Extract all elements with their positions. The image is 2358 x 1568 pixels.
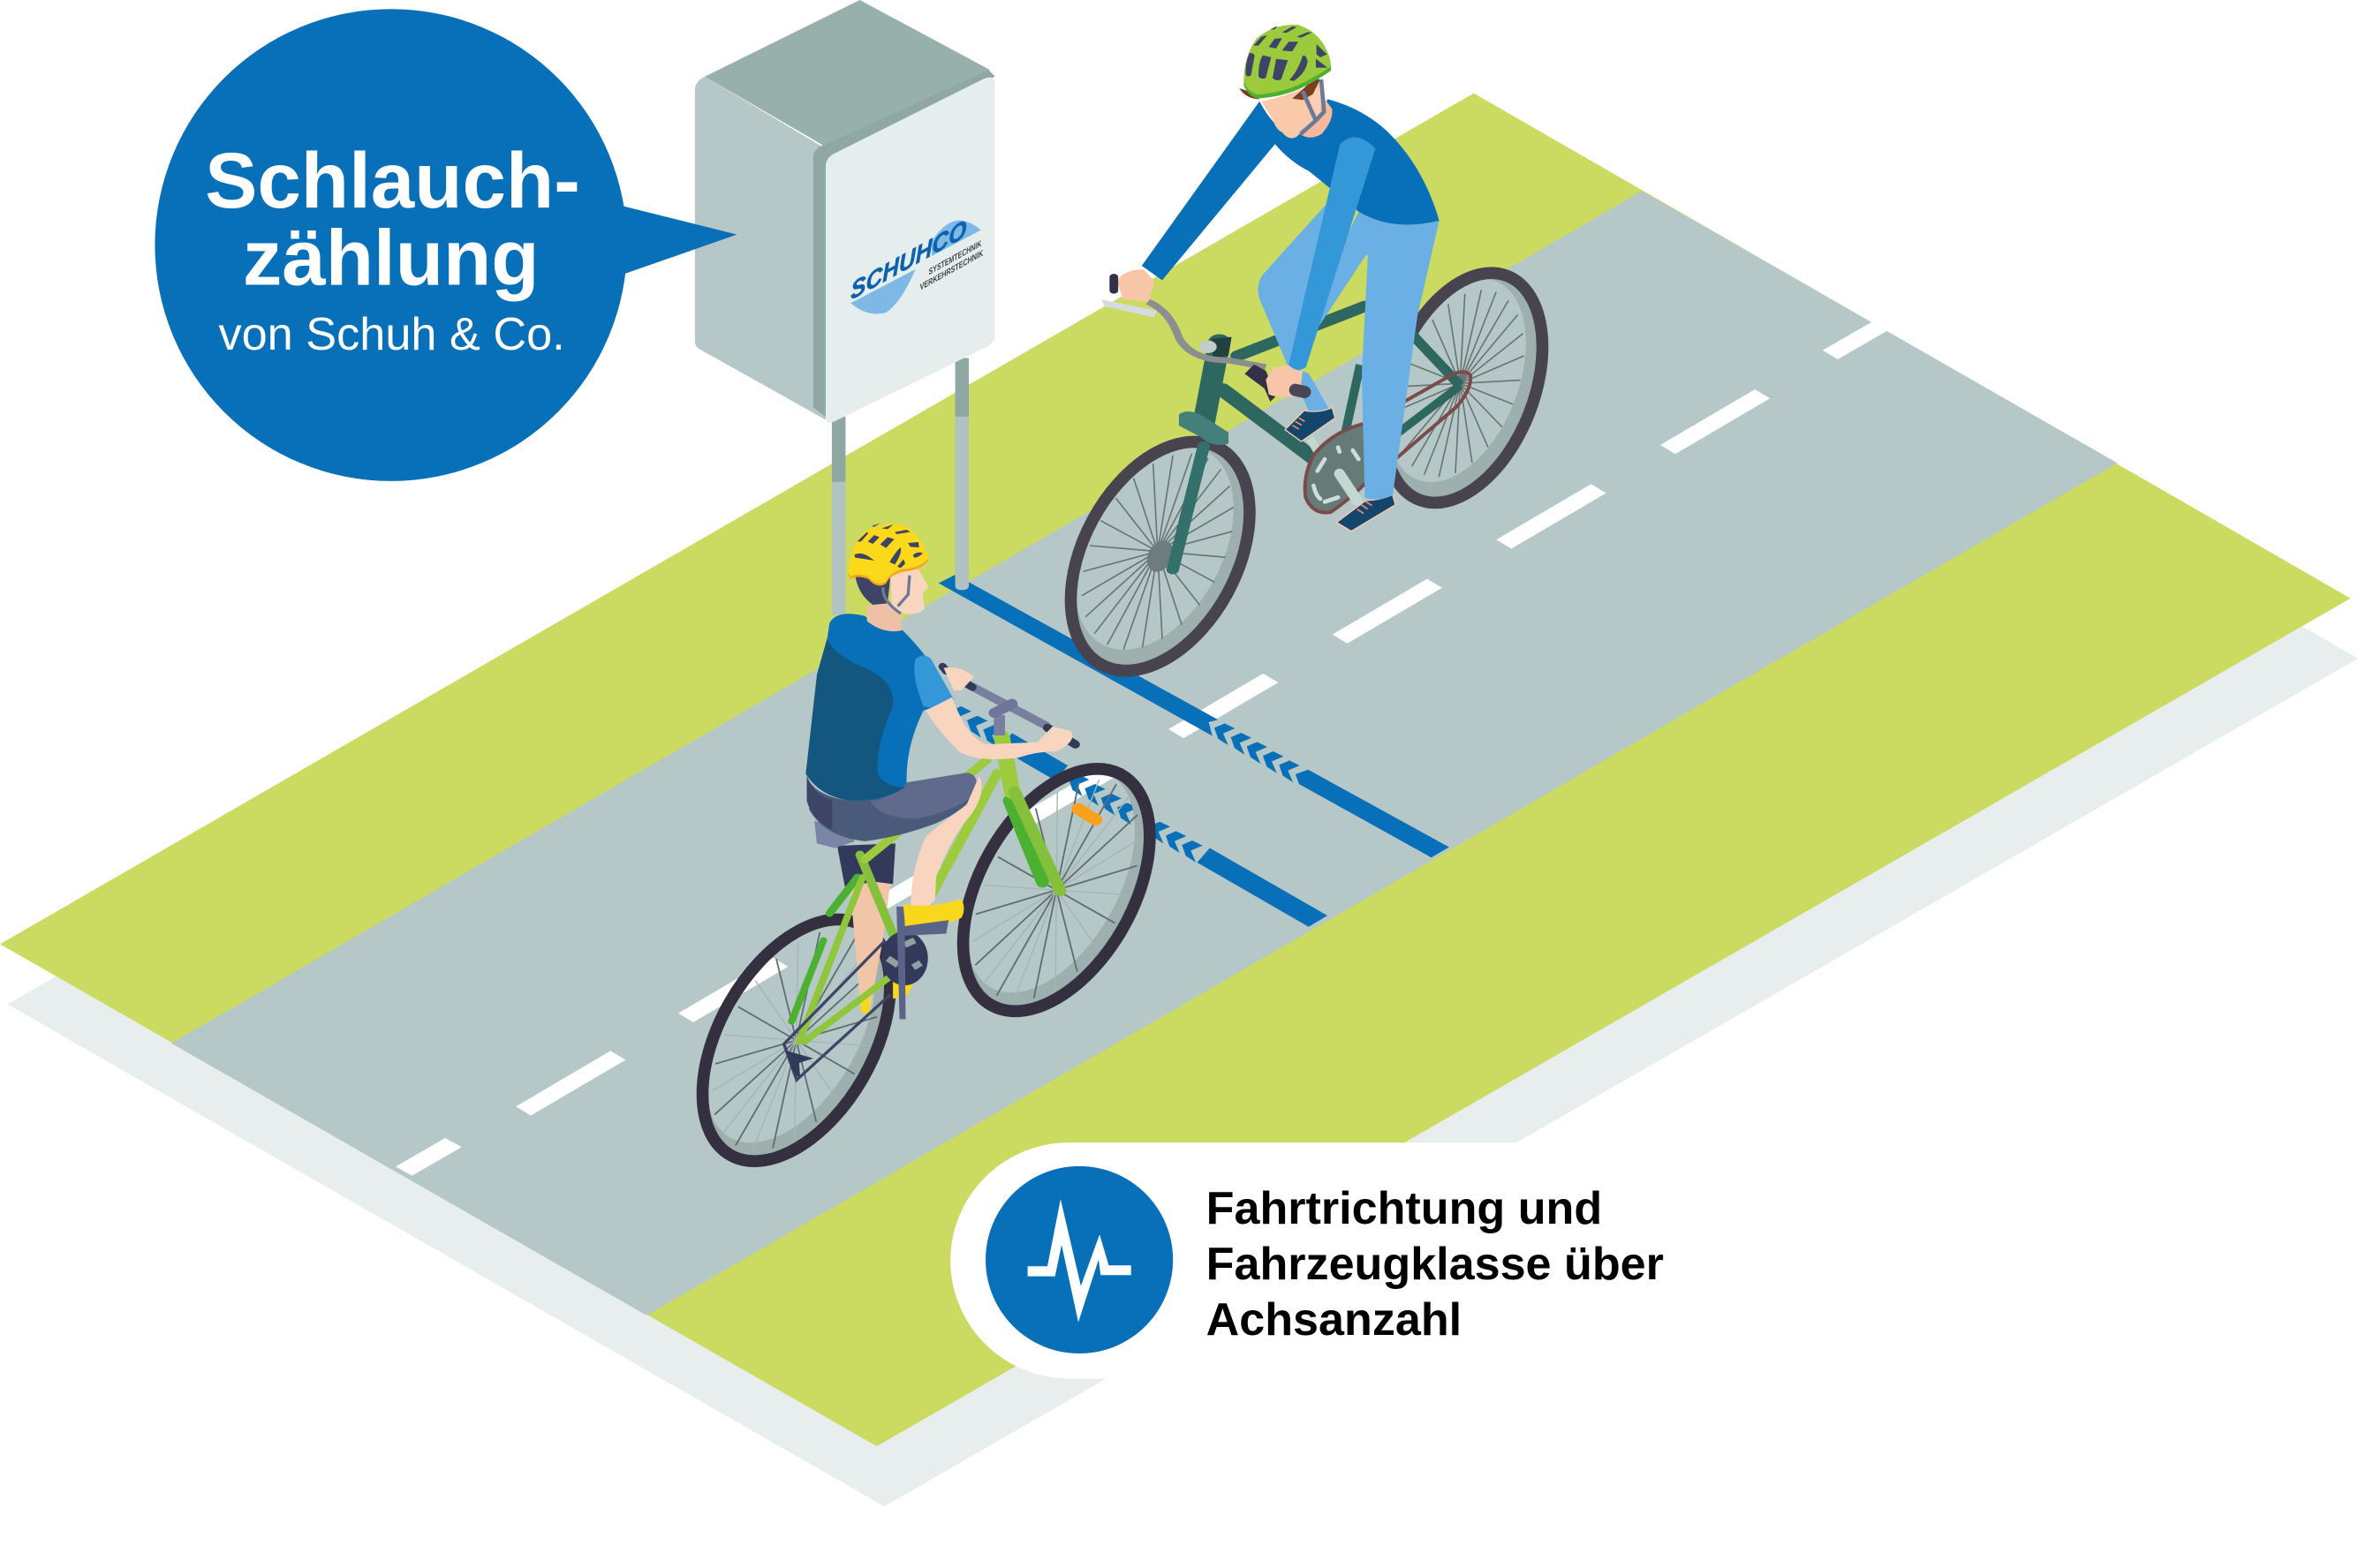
far shoe bbox=[1285, 408, 1335, 441]
callout: direction and vehicle class bbox=[950, 1142, 1804, 1378]
chain loop bbox=[1305, 372, 1470, 513]
box front bbox=[826, 78, 995, 423]
logo: VERKEHRSTECHNIK bbox=[920, 248, 983, 293]
logo: SYSTEMTECHNIK bbox=[929, 238, 981, 277]
shirt back shadow bbox=[805, 638, 904, 801]
icon: pulse in circle bbox=[986, 1166, 1173, 1353]
hose 1 chevrons bbox=[1214, 723, 1300, 782]
cycle path surface bbox=[171, 191, 2118, 1315]
speech bubble: title bbox=[155, 9, 737, 481]
counter box bbox=[695, 0, 995, 423]
face bbox=[1261, 81, 1323, 139]
logo text: SCHUHCO bbox=[850, 215, 966, 306]
torso and far arm bbox=[1142, 99, 1440, 280]
front wheel bbox=[925, 737, 1189, 1043]
callout text: Fahrtrichtung und bbox=[1206, 1183, 1602, 1234]
neck bbox=[867, 603, 903, 631]
head with green helmet bbox=[1239, 25, 1332, 139]
drivetrain and shoes bbox=[1285, 335, 1470, 531]
helmet strap bbox=[883, 576, 910, 614]
helmet strap bbox=[1301, 79, 1324, 134]
far hand bbox=[1117, 269, 1155, 302]
rear wheel bbox=[1353, 250, 1573, 525]
hose 1 solid parts bbox=[939, 575, 1449, 857]
yellow shoe bbox=[903, 899, 964, 929]
saddle bbox=[814, 821, 855, 848]
heading: Schlauch- bbox=[205, 137, 580, 224]
cyclist with green helmet bbox=[1034, 25, 1573, 701]
bicycle frame bbox=[791, 738, 1061, 1042]
far hand bbox=[943, 667, 974, 690]
bicycle frame bbox=[1173, 306, 1364, 569]
leg bbox=[911, 776, 982, 909]
near leg bbox=[1312, 212, 1440, 500]
poles of the counter box bbox=[832, 358, 969, 614]
hose 2 chevrons bbox=[951, 706, 1203, 863]
head with yellow helmet bbox=[849, 524, 929, 631]
handlebar bbox=[1148, 302, 1266, 367]
far pedal and crank bbox=[1310, 439, 1320, 456]
far leg bbox=[1258, 203, 1364, 418]
shirt bbox=[807, 614, 954, 801]
chain and chainring bbox=[784, 940, 890, 1080]
subheading: von Schuh & Co. bbox=[218, 309, 565, 360]
hair bbox=[855, 574, 890, 605]
callout text bbox=[1206, 1183, 1664, 1346]
front wheel bbox=[1034, 411, 1287, 701]
logo bbox=[850, 215, 983, 314]
sleeve bbox=[914, 655, 954, 708]
box side bbox=[695, 77, 826, 419]
green helmet bbox=[1243, 25, 1331, 99]
rear wheel bbox=[664, 887, 929, 1194]
hair bbox=[1239, 79, 1320, 100]
far leg bbox=[850, 882, 890, 1008]
callout text: Fahrzeugklasse über bbox=[1206, 1239, 1664, 1290]
cyclist with yellow helmet bbox=[664, 524, 1189, 1194]
logo swoosh bbox=[850, 220, 981, 314]
rear triangle bbox=[1345, 335, 1460, 433]
box top bbox=[705, 0, 990, 148]
face bbox=[890, 569, 929, 614]
counting hoses across the path bbox=[939, 575, 1449, 927]
shorts bbox=[807, 773, 977, 841]
callout text: Achsanzahl bbox=[1206, 1294, 1462, 1346]
arm bbox=[926, 697, 1072, 759]
near arm bbox=[1289, 137, 1375, 370]
near hand and brake bbox=[1244, 365, 1304, 402]
handlebar bbox=[966, 683, 1047, 727]
neck bbox=[1300, 97, 1332, 138]
box edge bbox=[813, 70, 995, 421]
far brake lever bbox=[1101, 299, 1157, 318]
yellow helmet bbox=[849, 524, 929, 585]
orange reflector bbox=[1078, 809, 1096, 819]
crank bbox=[1340, 474, 1357, 501]
speech bubble: title: zählung bbox=[243, 215, 540, 302]
hose 2 solid parts bbox=[1000, 733, 1327, 927]
chainring bbox=[1305, 424, 1366, 513]
centre line dashes bbox=[396, 321, 1887, 1176]
ear bbox=[1310, 88, 1320, 115]
near shoe bbox=[1336, 494, 1395, 531]
